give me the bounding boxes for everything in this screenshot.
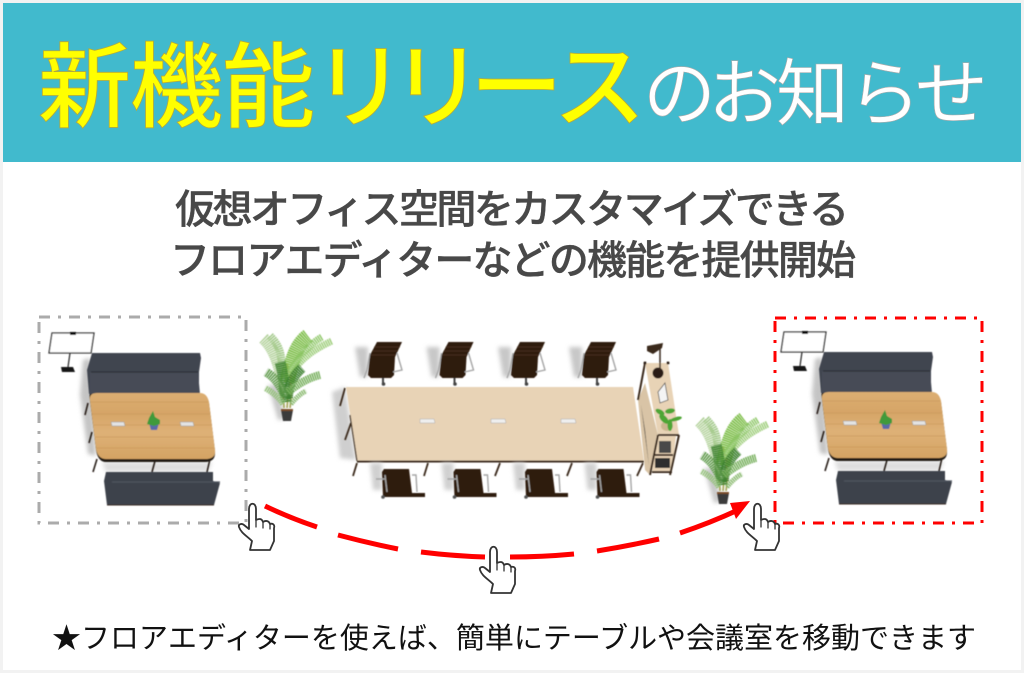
text: フロアエディターなどの機能を提供開始 — [170, 239, 856, 283]
plant right — [699, 419, 768, 504]
arrow head — [730, 501, 750, 519]
footer note: ★フロアエディターを使えば、簡単にテーブルや会議室を移動できます — [52, 622, 976, 655]
destination area dashed frame — [775, 318, 982, 523]
plant left — [263, 336, 332, 421]
chairs top row — [355, 342, 616, 386]
title: white part: のお知らせ — [643, 54, 988, 135]
icon: hand cursor left — [239, 504, 274, 550]
chairs bottom row — [370, 463, 640, 499]
furniture: table and sofas (original position) — [49, 332, 220, 505]
title banner — [3, 3, 1021, 162]
icon: hand cursor middle — [480, 547, 515, 593]
subtitle: 仮想オフィス空間をカスタマイズできる — [175, 188, 849, 232]
long meeting table — [332, 387, 644, 476]
icon: hand cursor right — [744, 504, 779, 550]
floor plan illustration — [39, 317, 982, 593]
red dashed move arrow — [265, 501, 750, 557]
shelf with lamp and plant — [638, 343, 682, 475]
furniture: table and sofas (new position) — [781, 331, 952, 504]
source area dashed frame — [39, 317, 246, 523]
title: yellow part: 新機能リリース — [38, 36, 646, 140]
